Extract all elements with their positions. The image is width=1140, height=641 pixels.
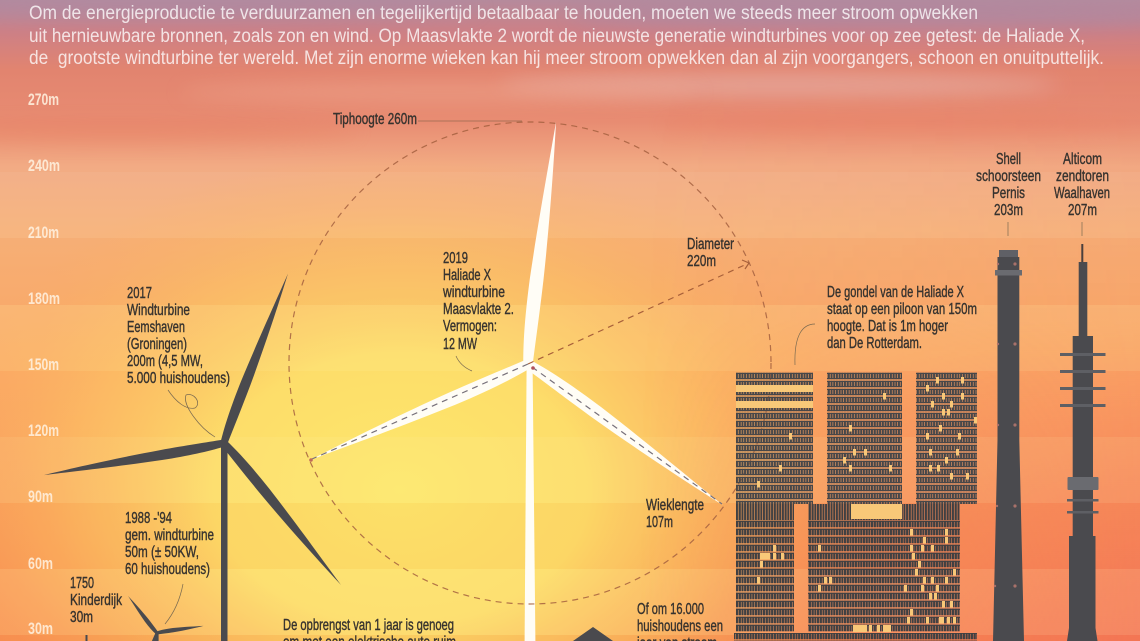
label: 2017 Eemshaven: (Groningen) <box>127 336 187 353</box>
label: Alticom zendtoren: zendtoren <box>1056 168 1109 185</box>
label: Alticom zendtoren: 207m <box>1068 202 1097 219</box>
height scale labels: 30m <box>28 620 53 638</box>
label: 2017 Eemshaven <box>127 285 230 387</box>
label: 1988-94 turbine: 1988 -'94 <box>125 510 172 527</box>
callout lines <box>165 222 1082 624</box>
label: 2017 Eemshaven: Windturbine <box>127 302 190 319</box>
height scale labels: 240m <box>28 157 60 175</box>
intro text <box>29 3 1104 69</box>
label: Shell schoorsteen <box>976 151 1041 219</box>
text: gondola note <box>827 284 977 352</box>
house icon <box>573 627 613 641</box>
label: 2019 Haliade X: Maasvlakte 2. <box>443 301 514 318</box>
label: Wieklengte: Wieklengte <box>646 497 704 514</box>
height scale labels: 270m <box>28 91 59 109</box>
height scale labels: 180m <box>28 290 60 308</box>
label: 2019 Haliade X: windturbine <box>442 284 505 301</box>
label: Wieklengte: 107m <box>646 514 673 531</box>
intro text: Om de energieproductie te verduurzamen en tegelijkertijd betaalbaar te houden, moeten we steeds meer stroom opwekken <box>29 3 978 24</box>
height scale labels: 90m <box>28 488 53 506</box>
label: 2017 Eemshaven: 200m (4,5 MW, <box>127 353 203 370</box>
label: 2019 Haliade X <box>442 250 514 353</box>
turbine: Kinderdijk 1750 mill <box>86 635 88 641</box>
label: Tiphoogte: Tiphoogte 260m <box>333 111 417 128</box>
label: 1750 Kinderdijk: 1750 <box>70 575 94 592</box>
turbine: Haliade X 2019 <box>308 121 728 641</box>
label: Shell schoorsteen: Shell <box>996 151 1021 168</box>
label: Diameter: Diameter <box>687 236 734 253</box>
label: 2019 Haliade X: Vermogen: <box>443 318 497 335</box>
height scale labels: 60m <box>28 555 53 573</box>
label: 1750 Kinderdijk: Kinderdijk <box>70 592 123 609</box>
text: gondola note: dan De Rotterdam. <box>827 335 922 352</box>
label: 2017 Eemshaven: Eemshaven <box>127 319 185 336</box>
text: yearly yield electric car <box>283 617 456 641</box>
label: 2017 Eemshaven: 5.000 huishoudens) <box>127 370 230 387</box>
label: 1988-94 turbine: 60 huishoudens) <box>125 561 210 578</box>
label: 2019 Haliade X: 12 MW <box>443 336 478 353</box>
height scale labels: 210m <box>28 224 59 242</box>
text: gondola note: De gondel van de Haliade X <box>827 284 964 301</box>
building: De Rotterdam <box>734 372 977 641</box>
label: 2019 Haliade X: 2019 <box>443 250 468 267</box>
label: Shell schoorsteen: schoorsteen <box>976 168 1041 185</box>
label: 1988-94 turbine <box>125 510 214 578</box>
label: Diameter <box>687 236 734 270</box>
tower: Alticom Waalhaven <box>1060 244 1106 641</box>
chimney: Shell Pernis <box>993 250 1024 641</box>
label: Alticom zendtoren: Waalhaven <box>1054 185 1110 202</box>
label: 1750 Kinderdijk <box>70 575 123 626</box>
label: Alticom zendtoren: Alticom <box>1063 151 1102 168</box>
label: 1750 Kinderdijk: 30m <box>70 609 93 626</box>
text: 16.000 households: Of om 16.000 <box>637 601 704 618</box>
text: gondola note: hoogte. Dat is 1m hoger <box>827 318 948 335</box>
label: Diameter: 220m <box>687 253 716 270</box>
height scale labels <box>28 91 60 638</box>
turbine: 2017 Eemshaven <box>43 272 346 641</box>
label: 2019 Haliade X: Haliade X <box>443 267 491 284</box>
label: 2017 Eemshaven: 2017 <box>127 285 152 302</box>
turbine: 1988-94 average <box>126 595 204 641</box>
label: Shell schoorsteen: 203m <box>994 202 1023 219</box>
label: 1988-94 turbine: gem. windturbine <box>125 527 214 544</box>
label: Alticom zendtoren <box>1054 151 1110 219</box>
height scale labels: 150m <box>28 356 59 374</box>
text: yearly yield electric car: De opbrengst van 1 jaar is genoeg <box>283 617 454 634</box>
label: Shell schoorsteen: Pernis <box>992 185 1025 202</box>
height scale labels: 120m <box>28 422 59 440</box>
text: gondola note: staat op een piloon van 150m <box>827 301 977 318</box>
lit windows <box>736 377 977 632</box>
text: 16.000 households <box>636 601 723 641</box>
label: 1988-94 turbine: 50m (± 50KW, <box>125 544 199 561</box>
text: 16.000 households: huishoudens een <box>637 618 723 635</box>
dashed rotor circle and measure lines <box>289 121 771 604</box>
label: Wieklengte <box>646 497 704 531</box>
